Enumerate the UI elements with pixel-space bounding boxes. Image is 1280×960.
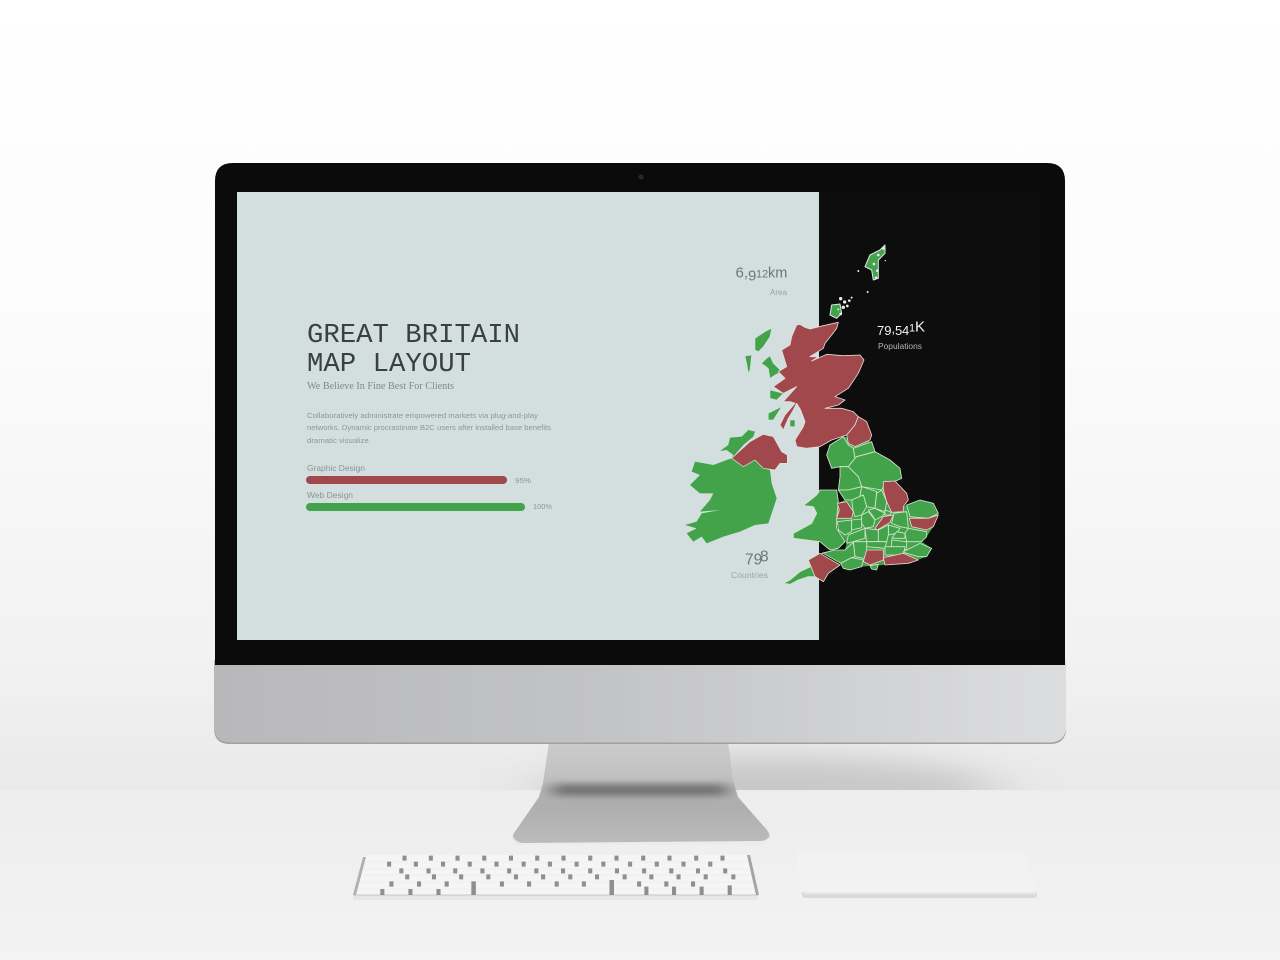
wales, devon and cornwall [783, 490, 845, 584]
body text: dramatic visualize. [307, 436, 371, 445]
camera [638, 174, 644, 180]
stat: countries [731, 548, 769, 580]
stat: populations: 1 [909, 322, 915, 334]
title: MAP LAYOUT [307, 350, 471, 380]
keyboard [353, 855, 759, 900]
stat: populations: , [892, 321, 895, 336]
ireland [685, 430, 787, 543]
stat: populations: Populations [878, 341, 922, 351]
stat: countries: 79 [745, 552, 762, 568]
stat: countries: Countries [731, 570, 768, 580]
monitor chin [214, 660, 1066, 744]
stat: area: 12 [756, 268, 768, 280]
subtitle: We Believe In Fine Best For Clients [307, 381, 454, 392]
stat: populations [877, 318, 925, 351]
stat: countries: 8 [760, 548, 769, 566]
stat: area: 6, [736, 264, 748, 282]
monitor bezel [215, 163, 1065, 665]
screen right dark panel [819, 192, 1040, 640]
progress: web design: 100% [533, 502, 552, 511]
republic of ireland [685, 430, 777, 543]
keyboard key gaps [380, 856, 735, 895]
scotland [773, 322, 864, 448]
body text [307, 411, 551, 445]
progress: graphic design: 95% [515, 476, 531, 485]
stat: area: Area [770, 288, 788, 297]
england and wales [783, 417, 938, 584]
title: GREAT BRITAIN [307, 321, 520, 351]
body text: networks. Dynamic procrastinate B2C users after installed base benefits [307, 423, 551, 432]
red counties [837, 417, 938, 565]
stat: area: km [768, 266, 787, 282]
islands [745, 245, 886, 427]
stat: populations: K [915, 318, 925, 336]
monitor stand [513, 742, 770, 845]
english counties [827, 437, 855, 468]
england base [823, 437, 938, 570]
monitor [214, 163, 1066, 744]
progress: web design: Web Design [307, 490, 353, 500]
trackpad [797, 852, 1037, 898]
progress: graphic design: Graphic Design [307, 463, 365, 473]
stat: area [736, 264, 788, 297]
title [307, 321, 520, 380]
stat: populations: 79 [877, 323, 891, 338]
screen left light panel [237, 192, 819, 640]
northern ireland [732, 434, 787, 470]
progress: web design [306, 490, 552, 511]
stat: area: 9 [748, 268, 756, 284]
stat: populations: 5 [895, 323, 902, 338]
stat: populations: 4 [902, 323, 909, 338]
progress: graphic design [306, 463, 531, 485]
body text: Collaboratively administrate empowered markets via plug-and-play [307, 411, 538, 420]
map: ireland and great britain [685, 245, 938, 584]
